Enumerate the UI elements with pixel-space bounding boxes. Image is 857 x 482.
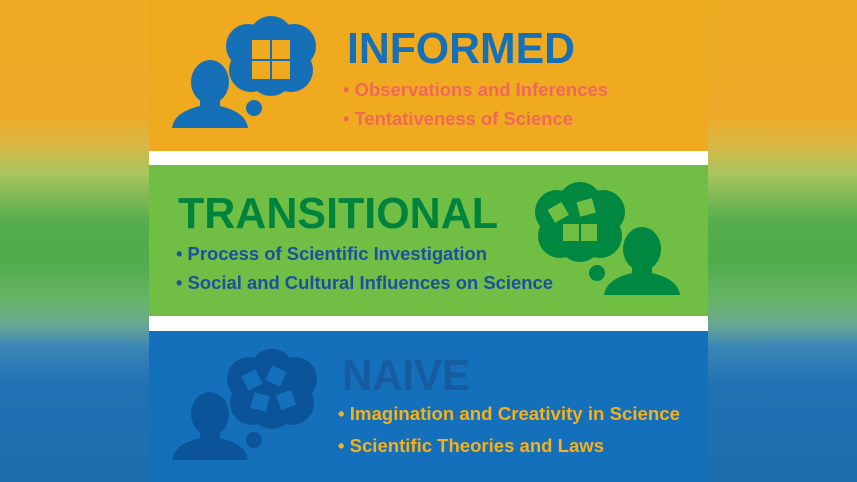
bullets: naive: • Scientific Theories and Laws xyxy=(338,436,604,456)
bullets: informed: • Observations and Inferences xyxy=(343,80,608,100)
bullets: transitional xyxy=(176,244,553,293)
bullets: transitional: • Social and Cultural Influences on Science xyxy=(176,273,553,293)
bullets: naive: • Imagination and Creativity in Science xyxy=(338,404,680,424)
bullets: informed: • Tentativeness of Science xyxy=(343,109,573,129)
title: transitional: TRANSITIONAL xyxy=(178,189,498,238)
title: naive: NAIVE xyxy=(342,351,470,400)
panel: naive xyxy=(149,331,708,482)
panel: transitional xyxy=(149,165,708,316)
bullets: informed xyxy=(343,80,608,129)
bullets: naive xyxy=(338,404,680,456)
bullets: transitional: • Process of Scientific Investigation xyxy=(176,244,487,264)
icon: naive thinker xyxy=(172,349,317,460)
icon: transitional thinker xyxy=(535,182,680,295)
title: informed: INFORMED xyxy=(347,24,575,73)
icon: informed thinker xyxy=(172,16,316,128)
panel: informed xyxy=(149,0,708,151)
